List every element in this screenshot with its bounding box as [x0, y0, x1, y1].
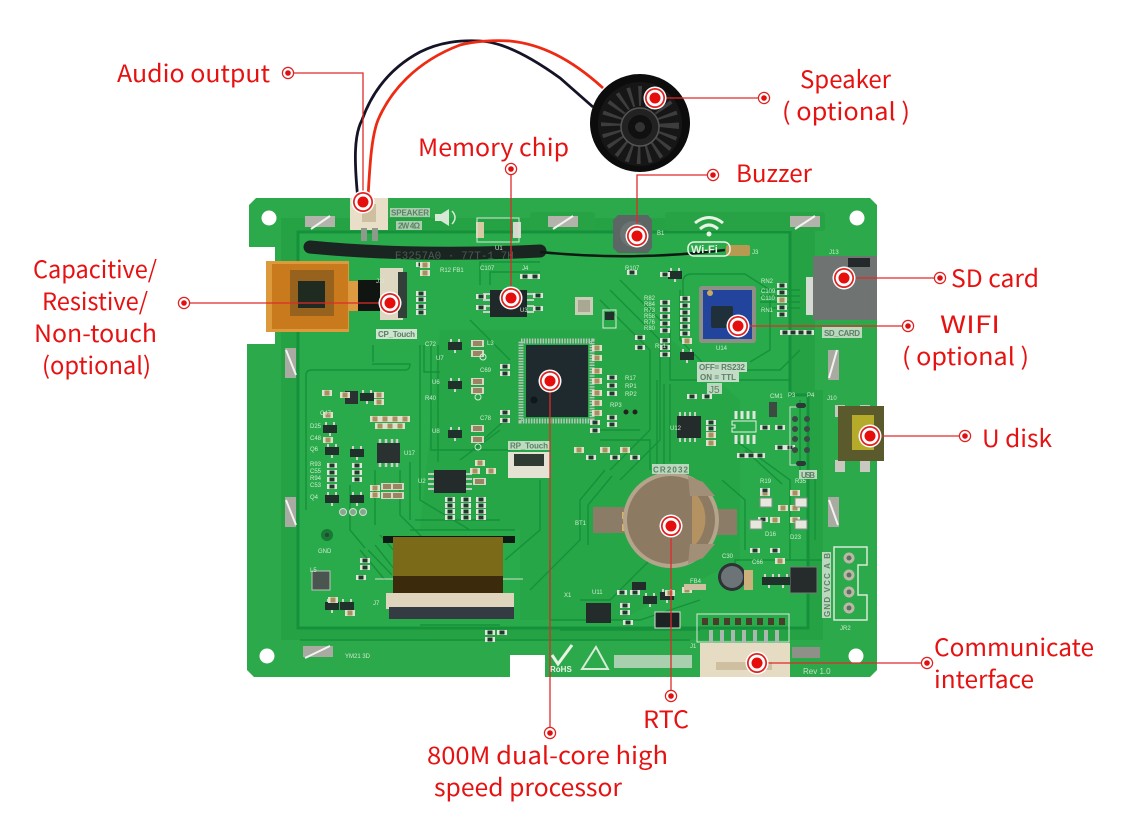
silkscreen reference designators: R51: [655, 344, 667, 350]
silkscreen reference designators: R40: [425, 396, 437, 402]
mode switches and pin headers: [732, 403, 817, 480]
callout: WIFI: ( optional ): [902, 337, 1029, 372]
RP touch connector: [508, 441, 550, 478]
silkscreen reference designators: R58: [644, 314, 656, 320]
silkscreen reference designators: RP1: [625, 384, 637, 390]
silkscreen reference designators: U8: [432, 429, 440, 435]
RP touch connector: RP_Touch: [510, 442, 548, 450]
silkscreen reference designators: P4: [807, 393, 815, 399]
silkscreen reference designators: R94: [310, 476, 322, 482]
silkscreen reference designators: U14: [716, 346, 728, 352]
silkscreen reference designators: RN2: [761, 279, 774, 285]
silkscreen reference designators: C47: [320, 411, 332, 417]
silkscreen reference designators: C55: [310, 469, 322, 475]
silkscreen reference designators: U17: [404, 451, 416, 457]
silkscreen reference designators: R107: [625, 266, 640, 272]
silkscreen reference designators: R84: [644, 302, 656, 308]
silkscreen reference designators: GND: [318, 549, 332, 555]
silkscreen reference designators: RP2: [625, 392, 637, 398]
speaker silkscreen: SPEAKER: [391, 208, 429, 218]
silkscreen reference designators: D23: [790, 535, 802, 541]
silkscreen reference designators: D25: [310, 424, 322, 430]
mounting holes: [260, 210, 864, 664]
silkscreen reference designators: U1: [495, 246, 503, 252]
speaker silkscreen: [390, 208, 455, 230]
silkscreen reference designators: L3: [487, 341, 494, 347]
silkscreen reference designators: Q4: [310, 495, 319, 501]
circuit board: [247, 198, 884, 677]
U disk port: [835, 405, 884, 472]
silkscreen reference designators: J4: [522, 266, 529, 272]
callout: touch options: (optional): [42, 346, 151, 381]
callout: SD card: [832, 259, 1039, 294]
silkscreen reference designators: C109: [761, 289, 776, 295]
callout: memory chip: [418, 128, 569, 310]
silkscreen reference designators: C53: [310, 483, 322, 489]
silkscreen reference designators: D16: [765, 532, 777, 538]
callout: processor: 800M dual-core high: [427, 736, 668, 771]
silkscreen reference designators: L5: [310, 568, 317, 574]
communication connector: [697, 614, 790, 677]
speaker silkscreen: 2W 4Ω: [398, 222, 421, 230]
callout: U disk: U disk: [982, 419, 1052, 454]
silkscreen reference designators: Q6: [310, 447, 319, 453]
SMD components: [321, 262, 814, 642]
silkscreen reference designators: BT1: [575, 521, 587, 527]
small ICs: [312, 297, 817, 628]
SD card slot: [806, 256, 877, 338]
silkscreen OFF ON J5: OFF= RS232: [699, 363, 746, 372]
silkscreen reference designators: R19: [760, 479, 772, 485]
silkscreen reference designators: C107: [480, 266, 495, 272]
silkscreen reference designators: J11: [376, 279, 386, 285]
callout: RTC: [643, 514, 689, 735]
callout: processor: speed processor: [434, 768, 623, 803]
callout: touch options: Resistive/: [42, 282, 149, 317]
touch connector: CP_Touch: [378, 330, 415, 339]
silkscreen reference designators: J10: [827, 396, 837, 402]
callout: U disk: [858, 419, 1052, 454]
silkscreen reference designators: R80: [644, 326, 656, 332]
metal slots: [285, 216, 839, 658]
silkscreen reference designators: C30: [722, 554, 734, 560]
callout: buzzer: Buzzer: [736, 154, 813, 189]
terminal block outline: [822, 547, 867, 620]
flexible touch cable: [266, 261, 383, 332]
speaker connector: [350, 198, 388, 241]
silkscreen reference designators: R73: [644, 308, 656, 314]
silkscreen reference designators: C110: [761, 296, 776, 302]
silkscreen reference designators: C66: [752, 560, 764, 566]
callout: RTC: RTC: [643, 700, 689, 735]
silkscreen reference designators: R82: [644, 296, 656, 302]
callout: touch options: Non-touch: [34, 314, 157, 349]
silkscreen reference designators: R93: [310, 462, 322, 468]
CR2032 battery holder: CR2032: [653, 466, 689, 474]
touch connector: [376, 268, 417, 339]
silkscreen reference designators: U12: [670, 426, 682, 432]
callout: SD card: SD card: [951, 259, 1039, 294]
callout: audio output: Audio output: [117, 54, 270, 89]
wifi logo: [688, 218, 730, 256]
silkscreen reference designators: R12 FB1: [440, 268, 464, 274]
silkscreen OFF ON J5: J5: [709, 385, 720, 396]
CR2032 battery holder: [593, 464, 737, 568]
silkscreen reference designators: JR2: [840, 626, 851, 632]
silkscreen reference designators: FB4: [690, 579, 702, 585]
callout: memory chip: Memory chip: [418, 128, 569, 163]
capacitor pads P2: [476, 218, 521, 242]
callout: WIFI: WIFI: [940, 305, 1000, 340]
silkscreen reference designators: RP3: [610, 403, 622, 409]
traces: [300, 262, 830, 640]
silkscreen reference designators: U2: [418, 479, 426, 485]
callout: communicate interface: [746, 628, 1094, 695]
silkscreen reference designators: CM1: [770, 394, 783, 400]
callout: processor: [427, 370, 668, 803]
buzzer: [613, 215, 652, 253]
silkscreen reference designators: U3: [520, 308, 528, 314]
silkscreen reference designators: R35: [795, 479, 807, 485]
RoHS and ESD marks: [550, 645, 692, 674]
silkscreen reference designators: R17: [625, 376, 637, 382]
silkscreen reference designators: C48: [310, 436, 322, 442]
callout: touch options: [33, 250, 402, 381]
callout: communicate interface: Communicate: [934, 628, 1094, 663]
callout: buzzer: [626, 154, 813, 248]
silkscreen reference designators: C72: [425, 342, 437, 348]
board outline: [247, 198, 877, 677]
speaker wires: [355, 41, 603, 200]
memory chip: [483, 290, 534, 317]
callout: touch options: Capacitive/: [33, 250, 158, 285]
board revision: Rev 1.0: [803, 667, 831, 676]
antenna cable: E3257A0 · 77T-1 7H: [395, 251, 514, 263]
RoHS and ESD marks: RoHS: [550, 665, 572, 674]
processor chip: [521, 341, 592, 421]
silkscreen reference designators: C78: [480, 416, 492, 422]
silkscreen OFF ON J5: [697, 362, 747, 396]
silkscreen reference designators: J13: [829, 250, 839, 256]
silkscreen reference designators: C69: [480, 368, 492, 374]
silkscreen reference designators: B1: [657, 231, 665, 237]
ribbon connector: [375, 536, 523, 619]
silkscreen reference designators: X1: [564, 593, 572, 599]
terminal block outline: GND VCC A B: [823, 553, 832, 617]
antenna cable: [310, 245, 750, 263]
silkscreen reference designators: U6: [432, 380, 440, 386]
silkscreen reference designators: J7: [373, 601, 380, 607]
callout: audio output: [117, 54, 374, 214]
silkscreen reference designators: U11: [592, 590, 603, 596]
silkscreen reference designators: J3: [752, 250, 759, 256]
silkscreen reference designators: P3: [788, 393, 796, 399]
icon: round speaker: [590, 74, 690, 172]
silkscreen reference designators: RN1: [761, 308, 774, 314]
callout: speaker: [644, 60, 910, 127]
silkscreen reference designators: [310, 231, 851, 660]
wifi module: [699, 286, 756, 343]
callout: speaker: ( optional ): [782, 92, 910, 127]
callout: speaker: Speaker: [800, 60, 892, 95]
mode switches and pin headers: USB: [801, 471, 815, 480]
callout: communicate interface: interface: [934, 660, 1034, 695]
silkscreen reference designators: U7: [436, 356, 444, 362]
silkscreen reference designators: J1: [690, 644, 697, 650]
electrolytic capacitor: [718, 563, 753, 591]
callout: WIFI: [726, 305, 1029, 372]
silkscreen OFF ON J5: ON = TTL: [700, 373, 736, 382]
silkscreen reference designators: R76: [644, 320, 656, 326]
silkscreen reference designators: YM21 3D: [345, 654, 371, 660]
SD card slot: SD_CARD: [824, 329, 860, 338]
wifi logo: Wi-Fi: [691, 244, 718, 256]
